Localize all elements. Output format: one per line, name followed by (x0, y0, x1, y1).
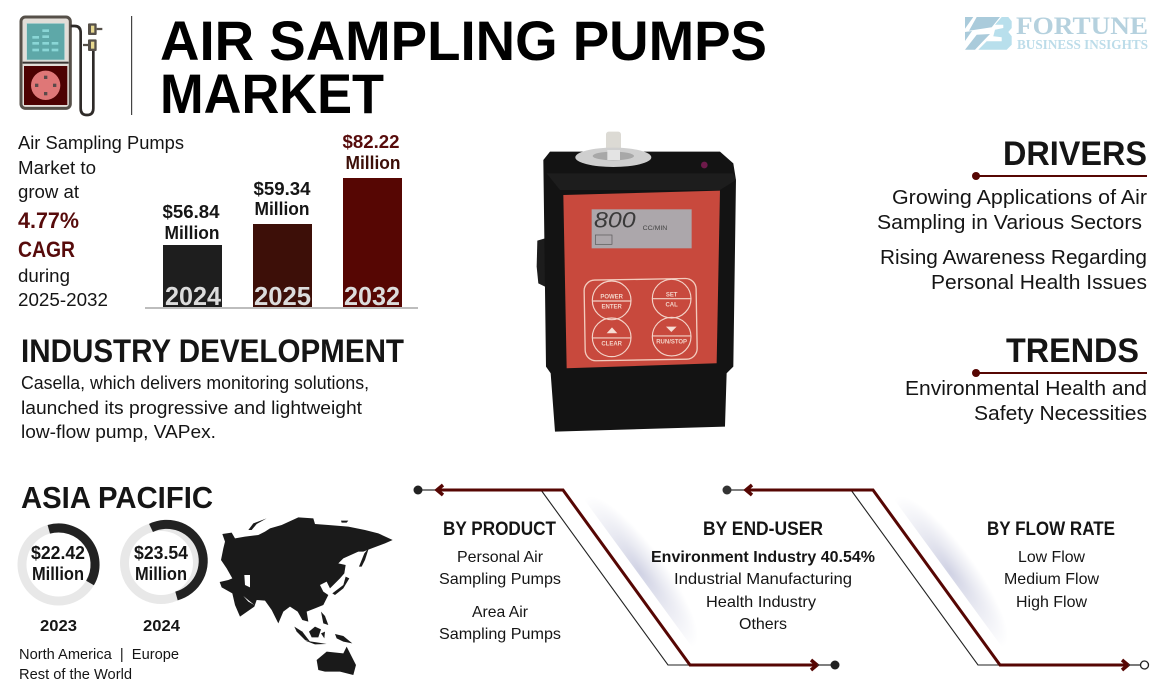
product photo: air sampling pump: CLEAR (601, 341, 623, 347)
text: CAGR growth statement: Air Sampling Pumps (18, 132, 184, 153)
text: CAGR growth statement: 2025-2032 (18, 289, 108, 310)
title: MARKET (160, 62, 384, 125)
text: CAGR growth statement: during (18, 265, 70, 286)
donut chart: 2024: 2024 (143, 618, 180, 635)
bar: 2024: Million (164, 223, 220, 243)
bar: 2032: Million (346, 153, 400, 173)
title (131, 9, 767, 125)
connector: by end-user to by flow rate (722, 470, 1148, 670)
panel: industry development (21, 333, 404, 442)
segment: by flow rate: Medium Flow (1004, 571, 1099, 588)
panel: industry development: Casella, which delivers monitoring solutions, (21, 373, 369, 393)
panel: trends: TRENDS (1006, 332, 1139, 370)
segment: by end-user: Industrial Manufacturing (674, 571, 852, 588)
logo: Fortune Business Insights: BUSINESS INSIGHTS (1017, 37, 1148, 52)
segment: by product: Sampling Pumps (439, 571, 561, 588)
donut chart: 2023: 2023 (40, 618, 77, 635)
donut chart: 2023: $22.42 (31, 543, 85, 563)
panel: drivers: Rising Awareness Regarding (880, 247, 1147, 269)
segment: by flow rate: BY FLOW RATE (987, 519, 1115, 540)
product photo: air sampling pump: ENTER (602, 305, 622, 311)
segment: by product: Personal Air (457, 549, 544, 566)
bar: 2025: 2025 (254, 281, 311, 311)
product photo: air sampling pump: SET (666, 293, 678, 299)
connector: by product to by end-user (414, 470, 840, 670)
text: other regions: North America | Europe (19, 646, 179, 663)
panel: industry development: low-flow pump, VAPex. (21, 422, 216, 442)
heading: Asia Pacific: ASIA PACIFIC (21, 480, 213, 515)
segment: by product: Area Air (472, 604, 529, 621)
logo: Fortune Business Insights: FORTUNE (1016, 13, 1148, 40)
product photo: air sampling pump: CC/MIN (643, 225, 668, 232)
panel: drivers: Personal Health Issues (931, 272, 1147, 294)
segment: by end-user: Health Industry (706, 594, 816, 611)
panel: trends: Safety Necessities (974, 403, 1147, 425)
panel: drivers (877, 135, 1147, 294)
bar: 2025 (253, 179, 312, 311)
donut chart: 2024 (124, 524, 203, 635)
segment: by end-user: Others (739, 616, 787, 633)
donut chart: 2024: $23.54 (134, 543, 188, 563)
text: other regions: Rest of the World (19, 666, 132, 683)
segment: by end-user (651, 519, 875, 633)
bar: 2024: 2024 (165, 281, 222, 311)
map: Asia Pacific (220, 517, 393, 675)
product photo: air sampling pump (537, 132, 736, 432)
bar: 2032: $82.22 (342, 132, 400, 152)
panel: industry development: launched its progressive and lightweight (21, 398, 362, 418)
segment: by flow rate: Low Flow (1018, 549, 1085, 566)
panel: drivers: Sampling in Various Sectors (877, 212, 1142, 234)
bar: 2025: Million (254, 199, 310, 219)
text: CAGR growth statement: CAGR (18, 237, 75, 262)
segment: by product (439, 519, 561, 643)
bar: 2032: 2032 (344, 281, 400, 311)
text: other regions (19, 646, 179, 683)
product photo: air sampling pump: CAL (665, 303, 678, 309)
text: CAGR growth statement (18, 132, 184, 310)
donut chart: 2023: Million (32, 564, 84, 584)
bar: 2024: $56.84 (162, 202, 220, 222)
donut chart: 2024: Million (135, 564, 187, 584)
panel: industry development: INDUSTRY DEVELOPMENT (21, 333, 404, 369)
text: CAGR growth statement: grow at (18, 181, 79, 202)
panel: drivers: Growing Applications of Air (892, 187, 1147, 209)
bar: 2032 (342, 132, 402, 311)
segment: by flow rate (987, 519, 1115, 611)
product photo: air sampling pump: 800 (594, 207, 637, 232)
title: AIR SAMPLING PUMPS (160, 9, 767, 72)
segment: by end-user: BY END-USER (703, 519, 823, 540)
segment: by flow rate: High Flow (1016, 594, 1087, 611)
panel: trends: Environmental Health and (905, 378, 1147, 400)
segment: by product: BY PRODUCT (443, 519, 556, 540)
panel: trends (905, 332, 1147, 425)
product photo: air sampling pump: RUN/STOP (656, 339, 687, 345)
text: CAGR growth statement: Market to (18, 157, 96, 178)
segment: by product: Sampling Pumps (439, 626, 561, 643)
logo: Fortune Business Insights (965, 13, 1148, 52)
icon: air sampling pump (21, 17, 102, 115)
segment: by end-user: Environment Industry 40.54% (651, 549, 875, 566)
panel: drivers: DRIVERS (1003, 135, 1147, 173)
product photo: air sampling pump: POWER (600, 294, 624, 300)
text: CAGR growth statement: 4.77% (18, 208, 79, 233)
bar: 2025: $59.34 (254, 179, 310, 199)
bar chart: market size (145, 132, 418, 311)
donut chart: 2023 (22, 528, 95, 635)
bar: 2024 (162, 202, 222, 311)
